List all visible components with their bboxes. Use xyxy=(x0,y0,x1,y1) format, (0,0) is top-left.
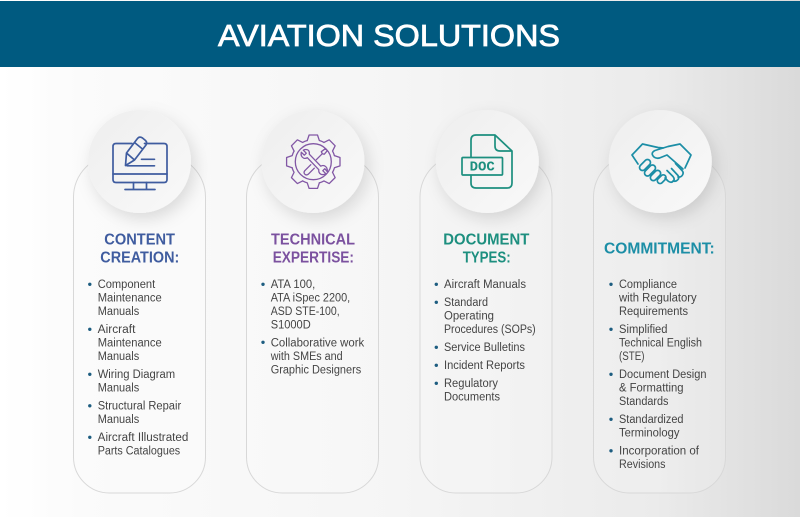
list: content creation: Wiring Diagram xyxy=(98,369,175,381)
list: technical expertise: ASD STE-100, xyxy=(271,306,340,318)
icon circle: content creation xyxy=(88,110,191,213)
list: technical expertise: Collaborative work xyxy=(271,338,364,350)
list: document types: Standard xyxy=(444,297,488,309)
panel: content creation xyxy=(74,110,206,493)
list: commitment: Terminology xyxy=(619,428,680,440)
list: content creation: Manuals xyxy=(98,382,139,394)
list: commitment: Technical English xyxy=(619,338,702,350)
list: document types: Procedures (SOPs) xyxy=(444,324,536,336)
header banner xyxy=(0,1,800,67)
heading: document types: TYPES: xyxy=(463,250,511,267)
list: content creation: Aircraft Illustrated xyxy=(98,432,188,444)
list: document types xyxy=(435,279,536,404)
icon: doc file: DOC xyxy=(470,160,495,176)
heading: content creation: CREATION: xyxy=(100,250,179,267)
list: document types: Operating xyxy=(444,310,494,322)
list: technical expertise xyxy=(261,279,364,376)
heading: document types: DOCUMENT xyxy=(443,231,530,248)
list: content creation: Maintenance xyxy=(98,292,162,304)
list: document types: Regulatory xyxy=(444,378,498,390)
list: content creation xyxy=(88,279,188,458)
list: content creation: Manuals xyxy=(98,351,139,363)
list: commitment: Incorporation of xyxy=(619,446,700,458)
heading: content creation: CONTENT xyxy=(104,231,175,248)
panel: technical expertise xyxy=(246,110,378,493)
list: commitment: Revisions xyxy=(619,459,666,471)
list: content creation: Manuals xyxy=(98,414,139,426)
list: content creation: Manuals xyxy=(98,306,139,318)
list: commitment: Standardized xyxy=(619,414,684,426)
list: commitment: & Formatting xyxy=(619,382,684,394)
list: content creation: Parts Catalogues xyxy=(98,446,180,458)
heading: commitment: COMMITMENT: xyxy=(604,240,715,257)
list: document types: Service Bulletins xyxy=(444,342,525,354)
title: AVIATION SOLUTIONS xyxy=(218,18,560,53)
list: content creation: Structural Repair xyxy=(98,400,181,412)
list: content creation: Maintenance xyxy=(98,338,162,350)
list: commitment: Standards xyxy=(619,396,669,408)
icon circle: commitment xyxy=(609,110,712,213)
list: commitment: Document Design xyxy=(619,369,706,381)
list: technical expertise: ATA 100, xyxy=(271,279,315,291)
list: technical expertise: Graphic Designers xyxy=(271,364,361,376)
heading: content creation xyxy=(100,231,179,267)
list: commitment: Simplified xyxy=(619,324,668,336)
icon: monitor with pencil xyxy=(113,137,167,190)
heading: technical expertise: EXPERTISE: xyxy=(273,250,354,267)
list: commitment: with Regulatory xyxy=(618,292,697,304)
heading: document types xyxy=(443,231,530,267)
icon: handshake xyxy=(632,144,691,185)
icon circle: technical expertise xyxy=(262,110,364,213)
list: content creation: Aircraft xyxy=(98,324,136,336)
heading: technical expertise xyxy=(271,231,355,267)
list: document types: Documents xyxy=(444,392,500,404)
list: content creation: Component xyxy=(98,279,156,291)
list: commitment: (STE) xyxy=(619,351,645,363)
panel: commitment xyxy=(594,110,726,493)
list: technical expertise: S1000D xyxy=(271,320,311,332)
panel: document types xyxy=(420,110,552,493)
list: document types: Aircraft Manuals xyxy=(444,279,526,291)
list: commitment: Compliance xyxy=(619,279,677,291)
icon: gear with tools xyxy=(287,135,340,188)
list: technical expertise: ATA iSpec 2200, xyxy=(271,292,350,304)
list: technical expertise: with SMEs and xyxy=(270,351,343,363)
list: commitment: Requirements xyxy=(619,306,688,318)
icon circle: document types xyxy=(436,110,539,213)
list: commitment xyxy=(609,279,706,471)
list: document types: Incident Reports xyxy=(444,360,525,372)
heading: technical expertise: TECHNICAL xyxy=(271,231,355,248)
